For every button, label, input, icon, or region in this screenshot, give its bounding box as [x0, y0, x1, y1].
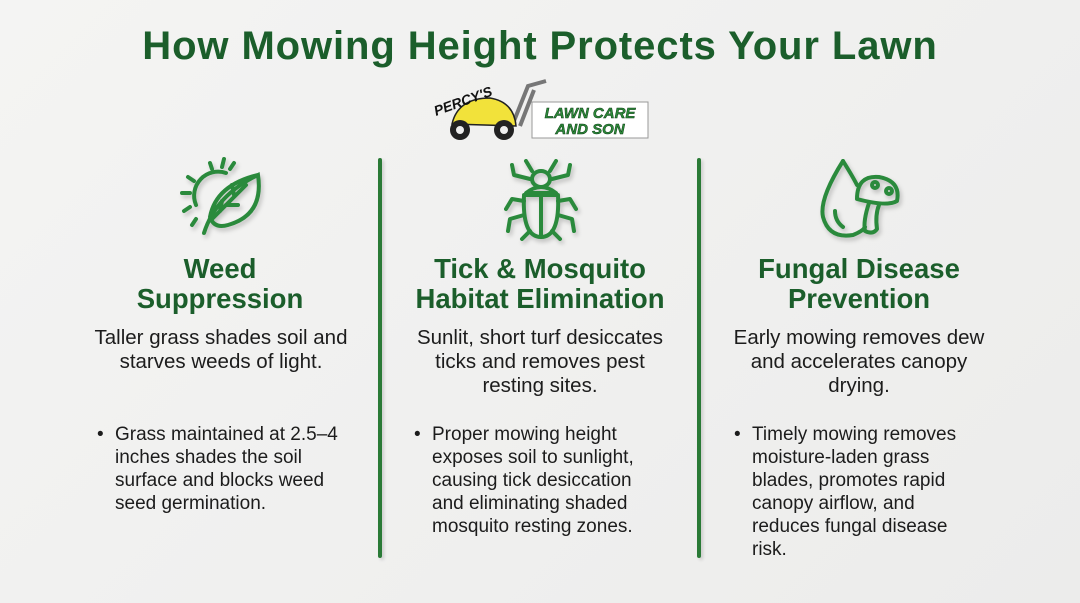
title: How Mowing Height Protects Your Lawn: [142, 24, 938, 68]
logo: [432, 79, 648, 140]
panel: fungal disease: [734, 159, 984, 560]
panel: tick and mosquito: [414, 159, 665, 537]
bullet: moisture-laden grass: [752, 447, 929, 468]
icon: beetle: [504, 159, 582, 245]
bullet: [414, 423, 684, 538]
heading: Prevention: [788, 283, 930, 314]
bullet: surface and blocks weed: [115, 470, 324, 491]
summary text: starves weeds of light.: [120, 350, 322, 373]
summary text: resting sites.: [482, 374, 598, 397]
heading: [758, 253, 960, 314]
logo: LAWN CARE: [545, 105, 636, 122]
bullet: and eliminating shaded: [432, 493, 627, 514]
bullet: Grass maintained at 2.5–4: [115, 424, 338, 445]
bullet: [734, 423, 1004, 561]
summary text: and accelerates canopy: [751, 350, 967, 373]
bullet: causing tick desiccation: [432, 470, 632, 491]
bullet: seed germination.: [115, 493, 266, 514]
heading: [415, 253, 665, 314]
summary text: [417, 326, 663, 397]
bullet: Proper mowing height: [432, 424, 617, 445]
bullet: inches shades the soil: [115, 447, 302, 468]
heading: Weed: [184, 253, 256, 284]
logo: AND SON: [554, 121, 626, 138]
heading: Suppression: [137, 283, 303, 314]
summary text: Taller grass shades soil and: [95, 326, 347, 349]
summary text: [734, 326, 984, 397]
heading: [137, 253, 303, 314]
heading: Fungal Disease: [758, 253, 960, 284]
divider 2: [697, 158, 701, 558]
panel: weed suppression: [94, 157, 347, 514]
bullet: canopy airflow, and: [752, 493, 915, 514]
bullet: [97, 423, 367, 515]
divider 1: [378, 158, 382, 558]
summary text: [94, 326, 347, 373]
summary text: Early mowing removes dew: [734, 326, 984, 349]
heading: Tick & Mosquito: [434, 253, 646, 284]
bullet: mosquito resting zones.: [432, 516, 633, 537]
bullet: blades, promotes rapid: [752, 470, 945, 491]
bullet: Timely mowing removes: [752, 424, 956, 445]
bullet: exposes soil to sunlight,: [432, 447, 634, 468]
logo: PERCY'S: [432, 83, 495, 119]
bullet: risk.: [752, 539, 787, 560]
summary text: drying.: [828, 374, 890, 397]
summary text: Sunlit, short turf desiccates: [417, 326, 663, 349]
icon: leaf and sun: [180, 157, 265, 239]
bullet: reduces fungal disease: [752, 516, 947, 537]
heading: Habitat Elimination: [415, 283, 665, 314]
summary text: ticks and removes pest: [435, 350, 645, 373]
icon: drop and mushroom: [820, 159, 904, 242]
